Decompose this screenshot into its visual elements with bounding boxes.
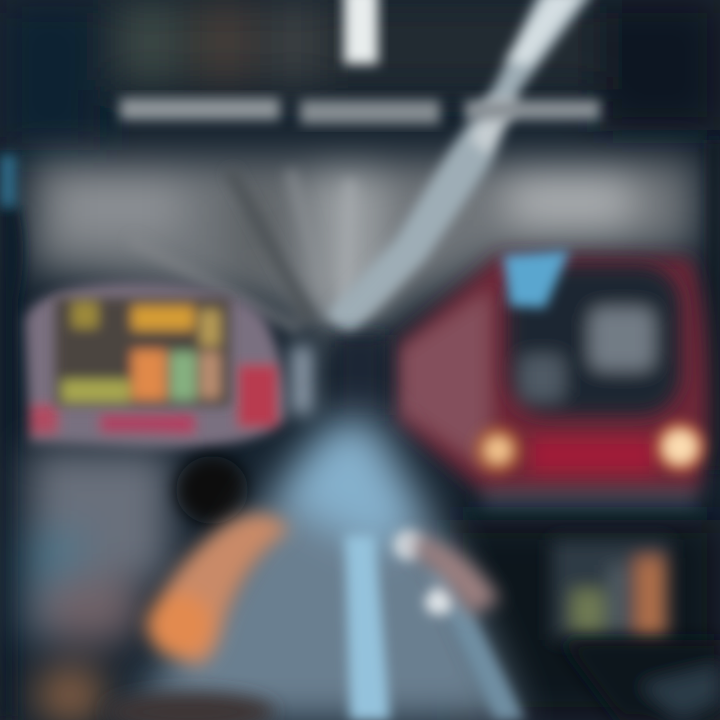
panel: lower right platform [450, 520, 720, 720]
icon: right headlight [655, 422, 705, 472]
chart: colourful window display [55, 298, 230, 406]
panel: lower left platform [25, 450, 170, 720]
dark shadow [176, 456, 248, 524]
station back wall [30, 160, 695, 335]
title band [120, 98, 600, 124]
icon: vertical ceiling light [344, 0, 378, 64]
icon: left headlight [474, 426, 522, 474]
train windscreen [508, 265, 680, 415]
bar chart [552, 540, 670, 640]
wall streaks [130, 170, 350, 330]
panel: left train [25, 283, 286, 448]
panel: central track glow [105, 415, 720, 720]
panel: right train [395, 250, 708, 512]
centre vanishing point [290, 335, 385, 415]
orange reflection [145, 514, 500, 665]
bottom dark edge [105, 640, 720, 720]
icon: blue screen [503, 250, 570, 308]
ceiling [0, 0, 720, 150]
ceiling lights [325, 0, 595, 335]
diagonal light beam [325, 0, 595, 335]
